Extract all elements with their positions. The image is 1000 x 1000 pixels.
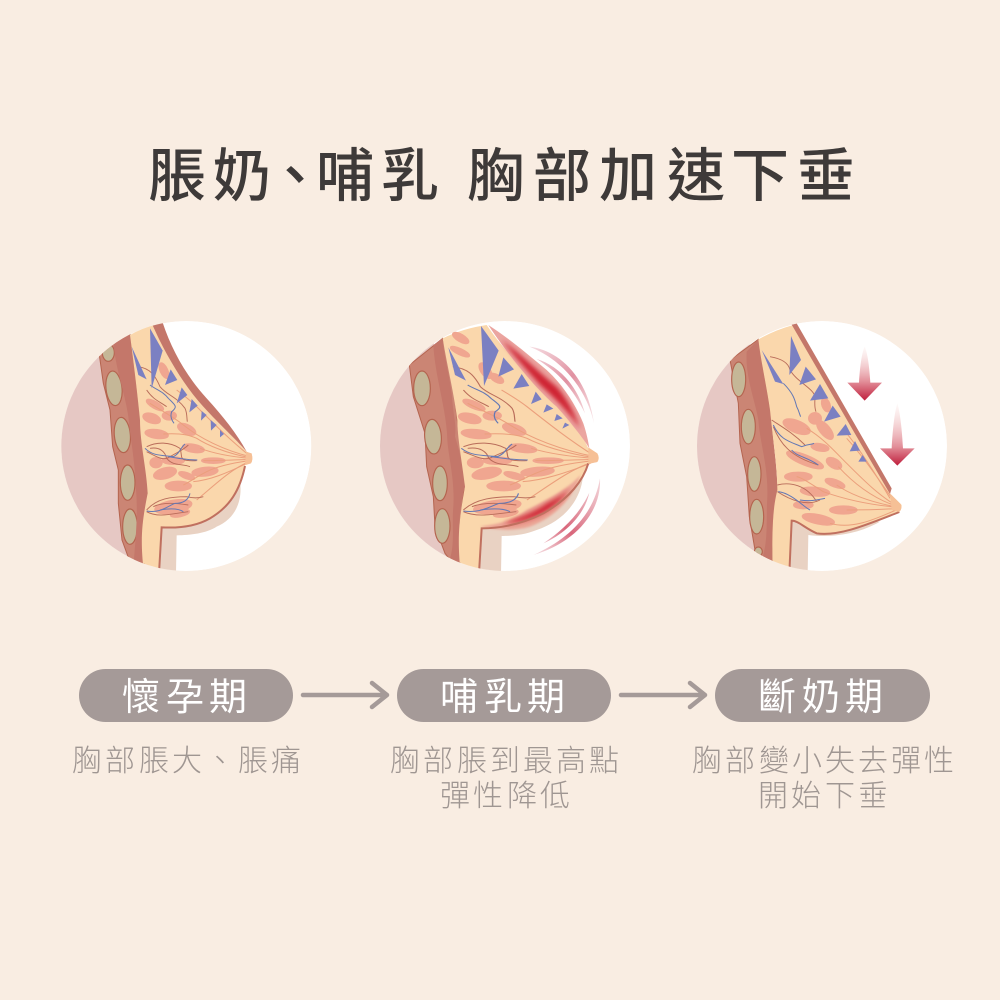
- arrow: breastfeeding to weaning: [621, 683, 705, 707]
- stage pill: pregnancy: [79, 669, 293, 722]
- stage pill: breastfeeding: 哺乳期: [440, 677, 565, 719]
- stage pill: weaning: [715, 669, 930, 722]
- stage pill: weaning: 斷奶期: [758, 677, 883, 719]
- title: 脹奶、哺乳胸部加速下垂: [148, 144, 855, 209]
- description: weaning: 胸部變小失去彈性: [692, 745, 954, 778]
- stage pill: breastfeeding: [397, 669, 611, 722]
- description: breastfeeding: 胸部脹到最高點: [390, 745, 619, 778]
- stage pill: pregnancy: 懷孕期: [122, 677, 247, 719]
- arrow: pregnancy to breastfeeding: [303, 683, 387, 707]
- description: pregnancy: 胸部脹大、脹痛: [72, 745, 301, 778]
- description: weaning: [692, 745, 954, 813]
- panel: weaning breast illustration: [690, 310, 947, 577]
- description: breastfeeding: 彈性降低: [440, 780, 570, 813]
- panel: pregnancy breast illustration: [61, 321, 312, 571]
- panel: breastfeeding breast illustration: [370, 310, 630, 577]
- description: weaning: 開始下垂: [758, 780, 888, 813]
- description: breastfeeding: [390, 745, 619, 813]
